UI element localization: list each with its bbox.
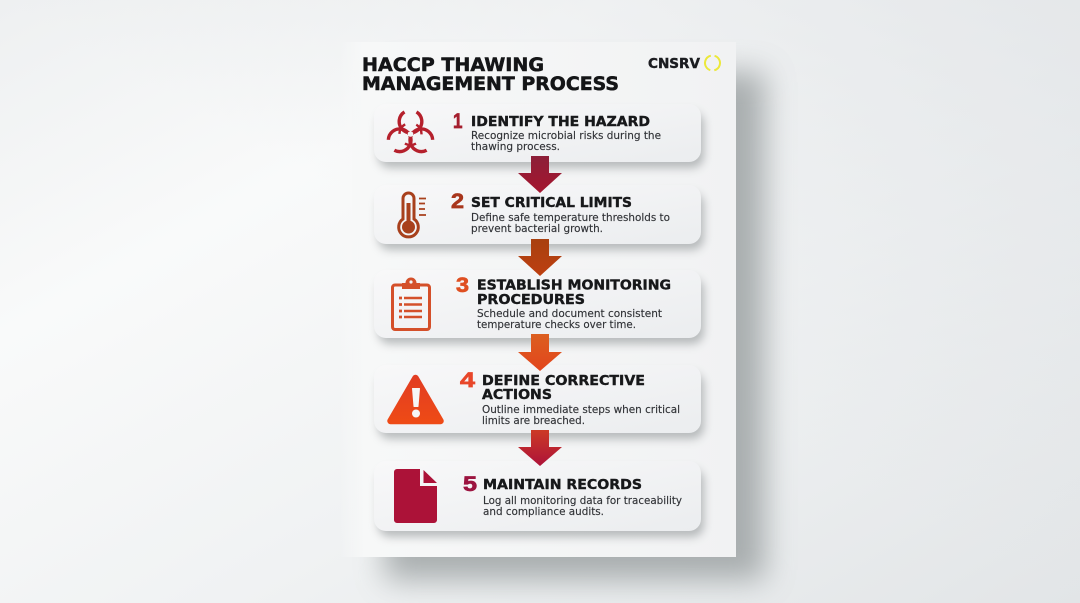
step 2 text: SET CRITICAL LIMITS [471, 195, 632, 211]
step number 4: 4 [460, 369, 475, 392]
step 3 text: PROCEDURES [477, 292, 585, 308]
step 4 text: DEFINE CORRECTIVE [482, 373, 645, 389]
step 5 text: Log all monitoring data for traceability [483, 495, 682, 507]
step 1 text [471, 114, 661, 153]
icon: thermometer [399, 193, 426, 237]
arrow: step 2 to 3 [518, 239, 562, 276]
arrow: step 1 to 2 [518, 156, 562, 193]
icon: biohazard [386, 112, 435, 155]
step 2 text: Define safe temperature thresholds to [471, 212, 670, 224]
step 4 text [482, 373, 680, 427]
icon: warning triangle [390, 378, 440, 421]
step 5 text: MAINTAIN RECORDS [483, 477, 642, 493]
step 4 text: ACTIONS [482, 387, 552, 403]
card shadows [378, 112, 704, 537]
arrow: step 4 to 5 [518, 430, 562, 466]
panel: step 2 set critical limits [374, 185, 701, 244]
step number 1: 1 [453, 110, 463, 133]
step 3 text: ESTABLISH MONITORING [477, 278, 671, 294]
paper drop shadow [385, 72, 765, 580]
title: HACCP THAWING [362, 54, 544, 76]
panel: step 3 establish monitoring procedures [374, 270, 701, 338]
paper sheet [340, 42, 736, 557]
step 5 text: and compliance audits. [483, 506, 604, 518]
logo: CNSRV: CNSRV [648, 56, 700, 72]
icon: document [394, 469, 437, 523]
panel: step 4 define corrective actions [374, 365, 701, 433]
title [362, 54, 619, 95]
step 1 text: Recognize microbial risks during the [471, 130, 661, 142]
step number 3: 3 [456, 274, 469, 297]
icon: clipboard [392, 278, 430, 330]
step 2 text: prevent bacterial growth. [471, 223, 603, 235]
panel: step 1 identify the hazard [374, 104, 701, 162]
step 3 text: temperature checks over time. [477, 319, 636, 331]
step number 2: 2 [451, 190, 464, 213]
step 1 text: IDENTIFY THE HAZARD [471, 114, 650, 130]
step 5 text [483, 477, 682, 518]
step 1 text: thawing process. [471, 141, 560, 153]
logo: CNSRV [648, 54, 722, 72]
panel: step 5 maintain records [374, 461, 701, 531]
step 3 text [477, 278, 671, 331]
step 2 text [471, 195, 670, 235]
arrow: step 3 to 4 [518, 334, 562, 371]
step number 5: 5 [463, 473, 477, 496]
title: MANAGEMENT PROCESS [362, 73, 619, 95]
step 4 text: Outline immediate steps when critical [482, 404, 680, 416]
step 4 text: limits are breached. [482, 415, 585, 427]
step 3 text: Schedule and document consistent [477, 308, 662, 320]
